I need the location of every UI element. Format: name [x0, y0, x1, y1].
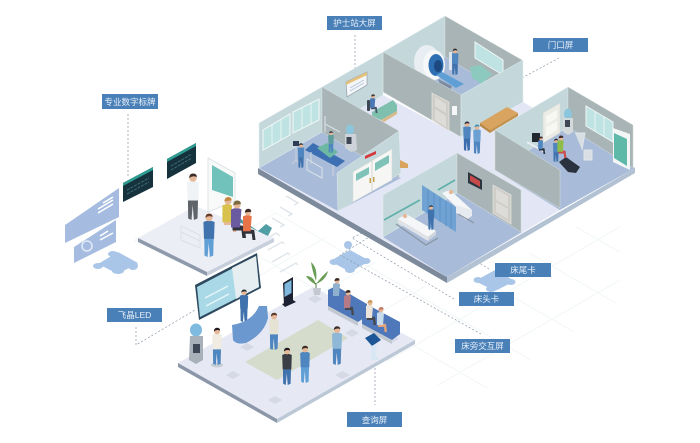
label: digital signage: 专业数字标牌 — [104, 97, 156, 107]
water dispenser — [189, 324, 203, 364]
person: ward nurse — [428, 205, 434, 230]
background isometric grid — [130, 190, 620, 400]
person: dark shirt — [282, 348, 292, 385]
person: woman — [332, 326, 342, 365]
person: visitor with cane — [211, 328, 223, 368]
query terminal — [365, 333, 381, 360]
reception desk — [232, 306, 268, 344]
receptionist — [240, 289, 248, 322]
sofa: back — [328, 278, 367, 326]
floating card: list — [65, 188, 119, 243]
floating card: contact — [74, 220, 116, 263]
water dispenser — [345, 124, 357, 152]
label: nurse station big screen — [327, 16, 382, 30]
person: seated child — [243, 209, 256, 240]
label: nurse station big screen: 护士站大屏 — [333, 18, 376, 28]
dashed leader lines — [128, 35, 559, 405]
cart — [181, 226, 200, 248]
person: assistant — [538, 136, 545, 154]
label: bed head card: 床头卡 — [474, 294, 500, 304]
door — [493, 185, 511, 224]
bed: far — [442, 190, 474, 223]
illustration scene — [65, 16, 635, 423]
window — [586, 106, 613, 142]
label: door screen — [533, 38, 588, 52]
cabinet — [613, 128, 630, 170]
person: dentist — [553, 139, 559, 162]
bench: small — [400, 160, 408, 168]
curtain — [422, 185, 456, 232]
bed: near — [396, 214, 438, 245]
person: nurse — [203, 214, 215, 257]
LED wall screen — [195, 253, 261, 320]
corridor floor — [258, 95, 562, 277]
person: technician — [452, 49, 458, 75]
waiting chairs — [222, 210, 272, 236]
windows — [263, 99, 319, 150]
person: doctor — [187, 174, 199, 220]
operating table — [305, 143, 345, 178]
person: seated woman — [222, 197, 236, 232]
nurse desk — [372, 100, 397, 120]
digital signage screen: left — [123, 167, 153, 202]
hospital building — [258, 16, 635, 283]
door — [432, 93, 449, 131]
lobby platform — [178, 253, 415, 423]
screen — [468, 172, 482, 190]
label: bed end card — [495, 263, 551, 277]
label: bedside interactive screen — [455, 339, 510, 353]
label: bed end card: 床尾卡 — [510, 265, 536, 275]
waiting platform — [138, 158, 274, 276]
monitor — [292, 141, 300, 164]
label: query screen: 查询屏 — [362, 415, 388, 425]
water dispenser — [563, 108, 573, 135]
window — [475, 42, 503, 75]
label: LED: 飞晶LED — [118, 310, 151, 320]
sofa: front — [362, 300, 400, 344]
chair — [367, 100, 370, 111]
bedside rails — [384, 180, 455, 220]
label: LED — [107, 308, 162, 322]
floor tiles — [226, 295, 399, 404]
person: seated man — [231, 200, 246, 238]
door — [543, 103, 560, 143]
person: surgeon left — [298, 143, 304, 168]
label: door screen: 门口屏 — [548, 40, 574, 50]
person: nurse — [300, 346, 310, 383]
building slab — [258, 168, 635, 283]
person: nurse at desk — [370, 94, 378, 113]
decorative puzzle shape: right — [474, 270, 516, 292]
label: bed head card — [459, 292, 514, 306]
kiosk — [282, 277, 296, 307]
chairs — [470, 65, 492, 84]
bench: corridor — [480, 107, 518, 133]
room: dental — [495, 87, 635, 210]
wall with door, nurse station side — [383, 52, 461, 137]
floor steps — [268, 196, 298, 272]
room: MRI — [383, 16, 523, 137]
partition wall with doors — [337, 131, 401, 211]
digital signage panel — [208, 158, 235, 212]
room: operating room — [259, 87, 401, 211]
person: surgeon right — [328, 131, 334, 153]
room: nurse station — [322, 52, 397, 132]
decorative puzzle shape: left — [93, 251, 138, 274]
person: patient — [557, 136, 566, 158]
person: doctor in corridor — [463, 122, 471, 151]
decorative puzzle shape: center — [330, 241, 370, 273]
label: digital signage — [102, 94, 158, 109]
door screen — [452, 106, 457, 115]
digital signage screen: right — [167, 143, 196, 179]
medical lamp — [325, 116, 340, 132]
double door — [353, 149, 392, 202]
operating lamp sign — [365, 151, 376, 159]
label: query screen — [347, 412, 402, 427]
dental chair — [559, 157, 580, 173]
dental equipment — [575, 133, 592, 160]
room: ward — [383, 153, 522, 277]
MRI scanner — [414, 45, 464, 90]
person: nurse in corridor — [473, 125, 481, 154]
monitor desk — [527, 133, 545, 152]
potted plant — [306, 262, 328, 295]
label: bedside interactive screen: 床旁交互屏 — [461, 341, 504, 351]
rug — [245, 320, 348, 380]
nurse station big screen — [346, 72, 367, 97]
person: man at desk — [269, 313, 279, 350]
